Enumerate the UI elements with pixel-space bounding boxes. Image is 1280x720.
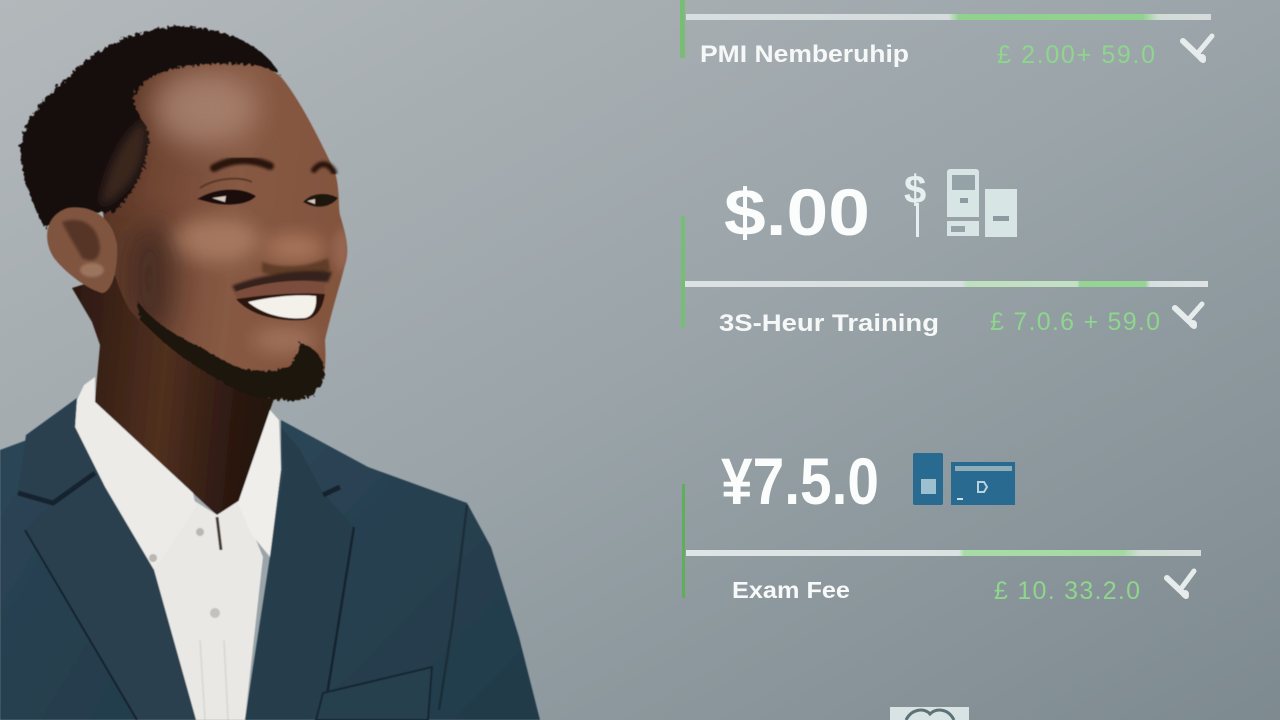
mustache [232, 271, 332, 296]
cropped icon at bottom edge [890, 707, 969, 720]
portrait: smiling man in dark blazer [0, 26, 540, 720]
ear [47, 207, 117, 293]
progress bar [686, 14, 1211, 20]
hair [20, 26, 280, 228]
progress bar [686, 550, 1201, 556]
label: 3S-Heur Training [719, 310, 939, 337]
icon: blue devices [913, 453, 1015, 505]
pocket [316, 667, 432, 720]
icon: check [1183, 36, 1212, 61]
head [101, 59, 350, 399]
neck [72, 270, 295, 515]
icon: dollar pin [904, 168, 926, 237]
lapels [18, 398, 196, 720]
icon: devices [947, 169, 1017, 237]
label: PMI Nemberuhip [700, 41, 909, 68]
icon: check [1175, 304, 1202, 327]
shirt [75, 377, 281, 720]
row 2: big amount and icons [721, 444, 1015, 518]
nose shadow [262, 258, 330, 278]
blazer [0, 398, 540, 720]
label: Exam Fee [732, 577, 850, 603]
icon: check [1167, 571, 1194, 597]
mouth [235, 281, 325, 320]
value: £ 2.00+ 59.0 [997, 41, 1155, 69]
accent line [681, 216, 685, 328]
icon: dollar pin: $ [904, 168, 926, 212]
progress bar [685, 281, 1208, 287]
amount: ¥7.5.0 [721, 444, 879, 518]
accent line [680, 0, 685, 58]
accent line [682, 484, 685, 598]
value: £ 7.0.6 + 59.0 [990, 308, 1160, 336]
amount: $.00 [724, 175, 870, 249]
brows [214, 160, 334, 172]
eyes [197, 179, 338, 207]
row 1: PMI Membership [680, 0, 1212, 69]
row 3: Exam Fee [682, 484, 1201, 605]
value: £ 10. 33.2.0 [994, 577, 1140, 605]
row 1: big amount and icons [724, 168, 1017, 249]
beard [137, 300, 324, 401]
row 2: 35-Hour Training [681, 216, 1208, 337]
